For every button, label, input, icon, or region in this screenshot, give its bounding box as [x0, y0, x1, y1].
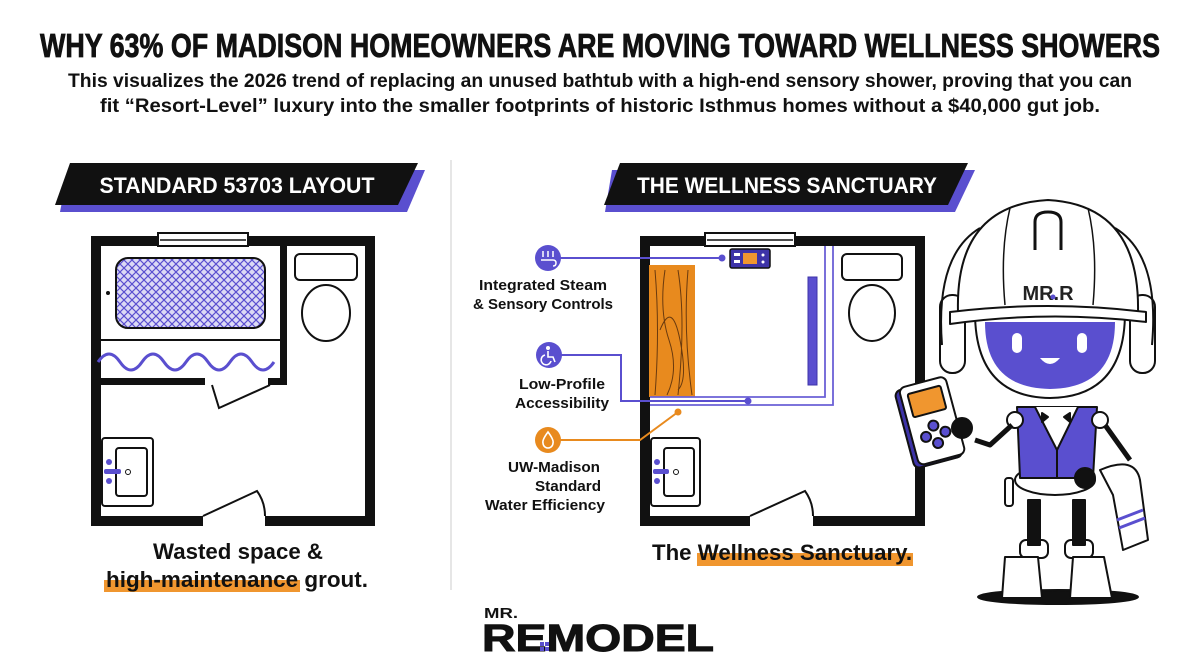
subtitle: fit “Resort-Level” luxury into the smaller footprints of historic Isthmus homes without a $40,000 gut job. [100, 96, 1100, 117]
subtitle: This visualizes the 2026 trend of replacing an unused bathtub with a high-end sensory shower, proving that you can [68, 71, 1132, 92]
banner: standard layout [55, 163, 425, 212]
mascot: robot: MR.R [1022, 283, 1074, 305]
caption: standard: high-maintenance grout. [106, 567, 368, 592]
callout: accessibility: Low-Profile [519, 376, 605, 393]
caption: wellness: The Wellness Sanctuary. [652, 540, 912, 565]
callout: water efficiency: UW-Madison [508, 459, 600, 476]
callout: water efficiency [485, 408, 682, 514]
callout: accessibility [515, 342, 752, 412]
callout: accessibility: Accessibility [515, 395, 610, 412]
callout: steam controls [473, 245, 726, 313]
logo: Mr. Remodel: MR. [484, 605, 518, 622]
banner: wellness sanctuary: THE WELLNESS SANCTUARY [637, 173, 937, 198]
mascot: robot [894, 200, 1155, 604]
callout: steam controls: & Sensory Controls [473, 296, 613, 313]
callout: water efficiency: Standard [535, 478, 601, 495]
logo: Mr. Remodel [482, 605, 714, 660]
banner: wellness sanctuary [604, 163, 975, 212]
callout: water efficiency: Water Efficiency [485, 497, 606, 514]
floor plan: wellness [640, 233, 925, 526]
caption: standard [104, 539, 368, 592]
banner: standard layout: STANDARD 53703 LAYOUT [100, 173, 375, 198]
caption: standard: Wasted space & [153, 539, 323, 564]
floor plan: standard [91, 233, 375, 526]
logo: Mr. Remodel: REMODEL [482, 618, 714, 660]
subtitle [68, 71, 1132, 117]
callout: steam controls: Integrated Steam [479, 277, 607, 294]
